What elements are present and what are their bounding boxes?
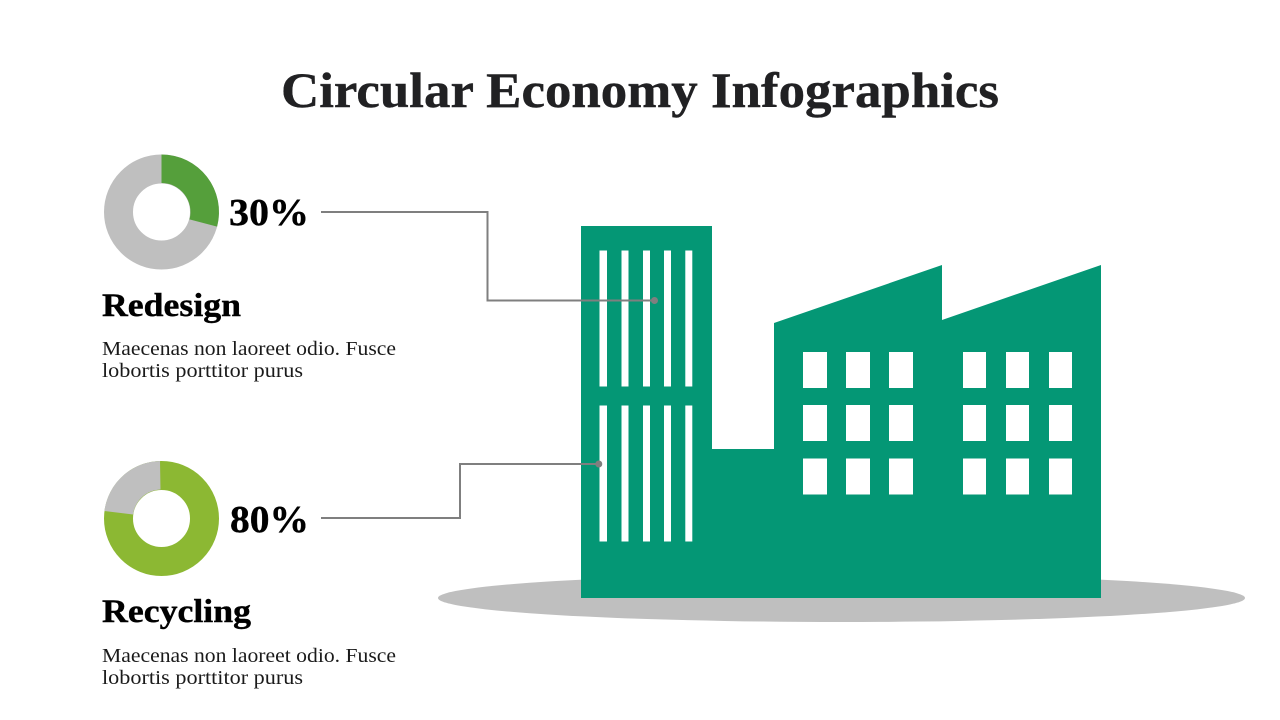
hall windows	[803, 352, 1072, 494]
text: Recycling description: Maecenas non laoreet odio. Fusce	[102, 645, 396, 667]
text: Recycling description: lobortis porttitor purus	[102, 667, 303, 689]
heading: Redesign: Redesign	[102, 288, 241, 324]
percentage: 80%: 80%	[230, 499, 309, 541]
factory silhouette	[581, 226, 1101, 598]
connector line: Redesign	[321, 212, 658, 304]
text: Redesign description: Maecenas non laoreet odio. Fusce	[102, 338, 396, 360]
donut chart: 80%	[104, 461, 204, 562]
tower windows	[600, 250, 692, 542]
connector line: Recycling	[321, 460, 602, 518]
heading: Recycling: Recycling	[102, 594, 252, 630]
donut chart: 30%	[118, 154, 219, 255]
percentage: 30%: 30%	[229, 192, 309, 234]
title: Circular Economy Infographics	[281, 62, 999, 118]
text: Redesign description: lobortis porttitor purus	[102, 360, 303, 382]
ground shadow ellipse	[438, 574, 1245, 622]
icon: factory building	[581, 226, 1101, 598]
